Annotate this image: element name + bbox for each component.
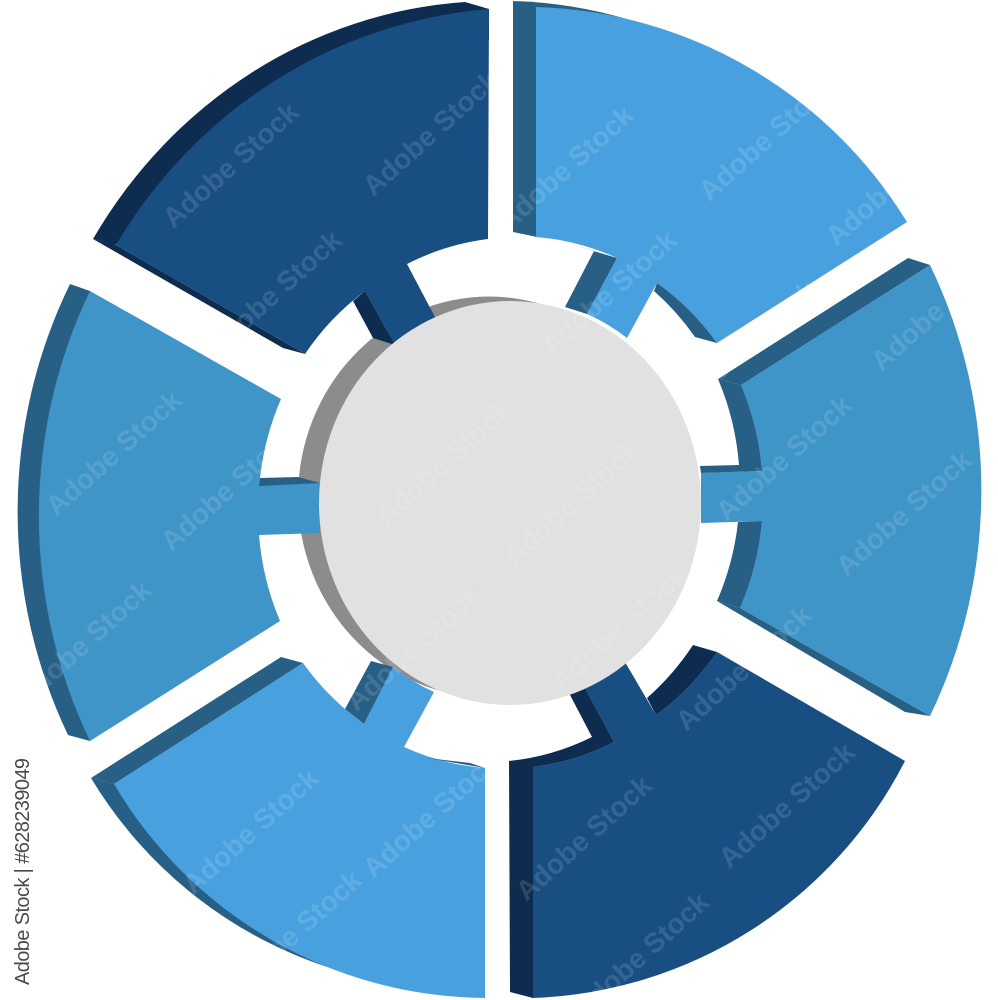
stock watermarks: Adobe Stock <box>155 419 303 557</box>
stock watermarks: Adobe Stock <box>200 224 348 362</box>
stock watermarks: Adobe Stock <box>693 69 841 207</box>
stock watermarks: Adobe Stock <box>220 864 368 1000</box>
stock watermarks: Adobe Stock <box>713 736 861 874</box>
stock watermarks: Adobe Stock <box>820 114 968 252</box>
stock watermarks: Adobe Stock <box>675 274 823 412</box>
stock watermarks: Adobe Stock <box>157 96 305 234</box>
center hub <box>319 301 701 705</box>
stock watermarks: Adobe Stock <box>492 99 640 237</box>
stock watermarks: Adobe Stock <box>830 444 978 582</box>
stock watermarks: Adobe Stock <box>370 394 518 532</box>
stock watermarks: Adobe Stock <box>340 579 488 717</box>
segment: top right <box>513 1 907 343</box>
stock watermarks: Adobe Stock <box>357 64 505 202</box>
stock watermarks: Adobe Stock <box>498 434 646 572</box>
stock watermarks: Adobe Stock <box>40 384 188 522</box>
stock id label: Adobe Stock | #628239049 <box>12 758 34 985</box>
stock watermarks: Adobe Stock <box>177 762 325 900</box>
stock watermarks: Adobe Stock <box>535 224 683 362</box>
segment: bottom right <box>509 645 905 998</box>
stock watermarks: Adobe Stock <box>510 769 658 907</box>
segment: left <box>18 284 320 741</box>
stock watermarks: Adobe Stock <box>710 389 858 527</box>
stock watermarks: Adobe Stock <box>545 559 693 697</box>
segment: right <box>700 258 981 716</box>
hub shadow <box>298 296 680 698</box>
stock watermarks: Adobe Stock <box>30 49 178 187</box>
stock watermarks: Adobe Stock <box>357 746 505 884</box>
stock watermarks: Adobe Stock <box>670 599 818 737</box>
segment: top left <box>93 2 489 354</box>
segment: bottom left <box>91 657 485 998</box>
stock watermarks: Adobe Stock <box>10 574 158 712</box>
